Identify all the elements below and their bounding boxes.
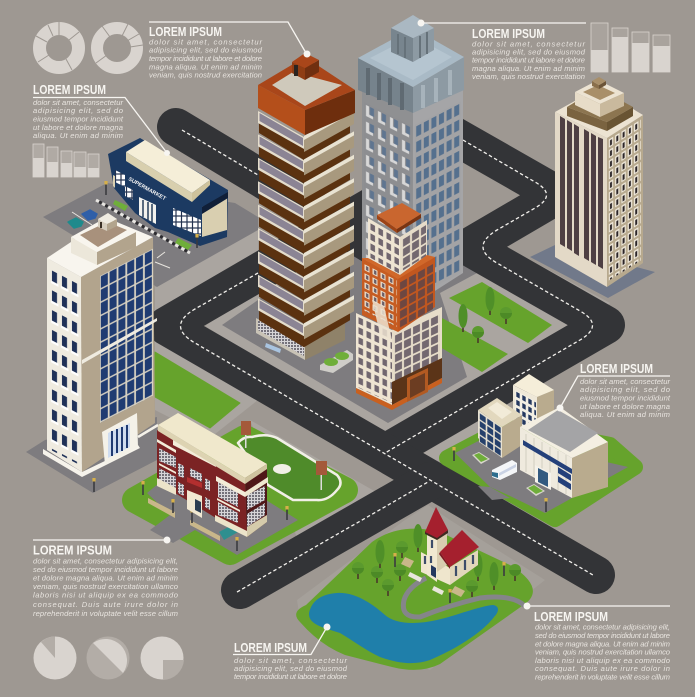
trees [352, 524, 521, 597]
callout: school: et dolore magna aliqua. Ut enim ad minim [33, 574, 178, 582]
callout: top centre: adipisicing elit, sed do eiusmod [149, 46, 263, 54]
tower entrance [102, 413, 138, 465]
church lawn [296, 529, 533, 670]
walking path [403, 578, 525, 617]
callout: church: dolor sit amet, consectetur adipisicing elit, [535, 622, 670, 632]
callout: supermarket: ut labore et dolore magna [33, 123, 123, 132]
callout: gray tower: adipisicing elit, sed do eiusmod [472, 48, 586, 56]
callout: gray tower [418, 20, 586, 81]
dark vertical stripes [560, 116, 603, 269]
callout: church: LOREM IPSUM [534, 610, 608, 624]
callout: gray tower: tempor incididunt ut labore et dolore [472, 56, 585, 64]
orange tower [356, 203, 442, 410]
benches and planters [393, 553, 506, 603]
callout: church: et dolore magna aliqua. Ut enim ad minim [535, 640, 670, 648]
sports court [238, 421, 340, 500]
beige tower [555, 77, 643, 287]
callout: gray tower: veniam, quis nostrud exercitation [472, 72, 585, 81]
chart: bars right [591, 23, 670, 72]
callout: clinic: dolor sit amet, consectetur [580, 377, 670, 386]
upper section [362, 203, 435, 279]
clinic lawn [447, 425, 635, 519]
chart: donut charts [36, 22, 143, 70]
park trees [458, 287, 512, 343]
callout: school: sed do eiusmod tempor incididunt ut labore [33, 565, 178, 574]
supermarket sign: SUPERMARKET [127, 177, 167, 202]
callout: supermarket: aliqua. Ut enim ad minim [33, 131, 123, 140]
callout: top centre: LOREM IPSUM [149, 25, 222, 39]
callout: clinic: aliqua. Ut enim ad minim [580, 410, 670, 419]
ambulance [492, 460, 517, 480]
callout: pond: tempor incididunt ut labore et dolore [234, 672, 347, 681]
callout: clinic: LOREM IPSUM [580, 362, 653, 376]
callout: clinic: adipisicing elit, sed do [580, 385, 670, 394]
callout: supermarket [33, 83, 170, 156]
school entrance [187, 477, 202, 488]
school plaza [147, 470, 298, 555]
road: south-west run [240, 481, 430, 590]
rear building [513, 374, 554, 436]
church park block [296, 507, 533, 670]
balcony floors [258, 108, 354, 347]
callout: church: consequat. Duis aute irure dolor in [535, 664, 670, 673]
callout: top centre: tempor incididunt ut labore et dolore [149, 54, 262, 63]
road: winding right branch [385, 122, 606, 453]
callout: school: reprehenderit in voluptate velit esse cillum [33, 609, 178, 618]
school building [157, 413, 268, 537]
callout: supermarket: adipisicing elit, sed do [33, 106, 123, 115]
callout: top centre [149, 22, 310, 80]
supermarket building [108, 138, 228, 250]
callout: school: dolor sit amet, consectetur adipisicing elit, [33, 556, 178, 566]
middle section [362, 257, 435, 340]
central planter [320, 350, 353, 373]
school lawn [135, 438, 345, 552]
left lawn [155, 352, 240, 428]
callout: pond [233, 624, 348, 681]
callout: gray tower: LOREM IPSUM [472, 27, 545, 41]
park beside the towers [440, 282, 552, 372]
tower entrance [407, 368, 428, 402]
callout: gray tower: magna aliqua. Ut enim ad minim [472, 64, 585, 73]
callout: supermarket: eiusmod tempor incididunt [33, 114, 124, 124]
lower section [356, 307, 442, 410]
school block [135, 413, 345, 555]
callout: gray tower: dolor sit amet, consectetur [472, 40, 585, 48]
clinic plaza [455, 435, 628, 513]
callout: school: LOREM IPSUM [33, 544, 112, 558]
callout: clinic: ut labore et dolore magna [580, 402, 670, 411]
callout: supermarket: dolor sit amet, consectetur [33, 98, 123, 107]
callout: school: consequat. Duis aute irure dolor in [33, 600, 178, 609]
road: left curve and long south-east run [166, 190, 596, 575]
callout: pond: LOREM IPSUM [234, 641, 307, 655]
callout: pond: dolor sit amet, consectetur [234, 656, 347, 665]
brown tower [256, 53, 355, 360]
callout: church: laboris nisi ut aliquip ex ea commodo [535, 656, 670, 665]
callout: supermarket: LOREM IPSUM [33, 83, 106, 97]
ground: sidewalks and plazas [26, 183, 655, 670]
church [421, 507, 479, 585]
callout: church: reprehenderit in voluptate velit esse cillum [535, 672, 670, 682]
supermarket block [68, 138, 228, 268]
chart: bars left [33, 144, 99, 177]
callout: school: laboris nisi ut aliquip ex ea commodo [33, 590, 178, 600]
road: upper left branch [176, 127, 400, 262]
benches and lamps [141, 481, 289, 551]
tower base [256, 318, 345, 360]
gray tower [358, 15, 464, 306]
tower roof [258, 53, 355, 135]
callout: top centre: dolor sit amet, consectetur [149, 38, 262, 46]
chart: pie charts [34, 636, 184, 680]
callout: school: veniam, quis nostrud exercitation ullamco [33, 582, 178, 591]
callout: pond: adipisicing elit, sed do eiusmod [234, 664, 348, 673]
white tower roof [47, 218, 153, 277]
callout: church [524, 602, 670, 682]
planters and lamps [452, 447, 548, 512]
parking bays and cars [68, 210, 170, 268]
callout: church: veniam, quis nostrud exercitation ullamco [535, 648, 670, 656]
walkway to tower [138, 425, 158, 437]
callout: church: sed do eiusmod tempor incididunt ut labore [535, 631, 670, 640]
clinic block [447, 374, 635, 519]
main clinic building [520, 407, 608, 498]
callout: school [33, 536, 178, 618]
callout: clinic: eiusmod tempor incididunt [580, 394, 671, 402]
callout: top centre: magna aliqua. Ut enim ad minim [149, 62, 262, 72]
road dashes [180, 130, 593, 592]
orange tower roof [377, 203, 421, 229]
white tower [43, 213, 157, 492]
callout: top centre: veniam, quis nostrud exercitation [149, 70, 262, 80]
callout: clinic [556, 362, 671, 419]
barrier [96, 200, 190, 253]
pond [309, 593, 498, 663]
blue building [478, 398, 522, 458]
roads [166, 122, 606, 592]
